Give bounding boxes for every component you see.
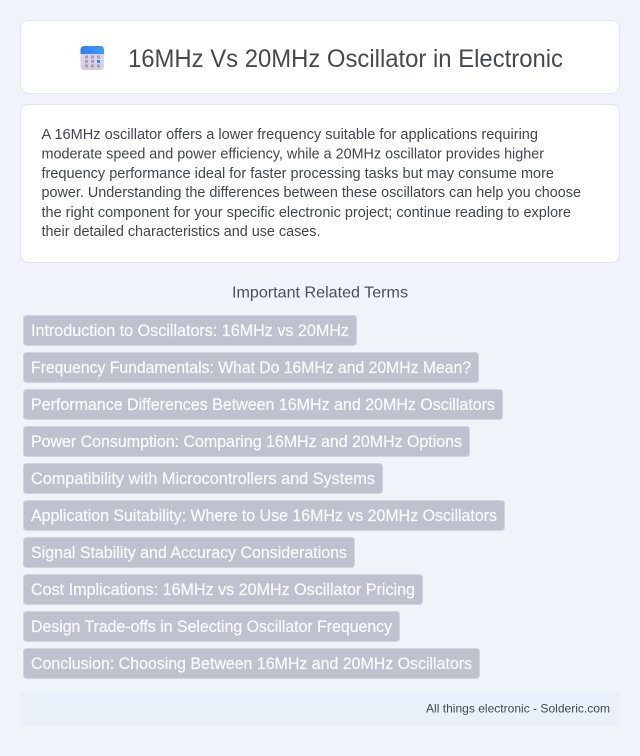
term 4 xyxy=(24,426,470,456)
panel: header xyxy=(20,20,620,94)
footer credit: All things electronic - Solderic.com xyxy=(426,702,610,716)
term 10 xyxy=(24,648,480,678)
term 1 xyxy=(24,316,356,346)
term 9 xyxy=(24,612,400,642)
panel: introduction text xyxy=(20,104,620,262)
term 6 xyxy=(24,500,504,530)
term 3 xyxy=(24,390,502,420)
term 2 xyxy=(24,352,478,382)
icon: calendar xyxy=(80,46,104,70)
text block: introduction paragraph: frequency performance ideal for faster processing tasks but may consume more xyxy=(42,166,554,182)
term 8: Cost Implications: 16MHz vs 20MHz Oscillator Pricing xyxy=(31,581,415,599)
term 7 xyxy=(24,538,354,568)
term 6: Application Suitability: Where to Use 16MHz vs 20MHz Oscillators xyxy=(31,507,497,525)
title: 16MHz Vs 20MHz Oscillator in Electronic xyxy=(128,45,563,73)
term 1: Introduction to Oscillators: 16MHz vs 20MHz xyxy=(31,322,349,340)
text block: introduction paragraph: power. Understanding the differences between these oscillators can help you choose xyxy=(42,185,581,201)
term 9: Design Trade-offs in Selecting Oscillator Frequency xyxy=(31,618,393,636)
text block: introduction paragraph: A 16MHz oscillator offers a lower frequency suitable for applications requiring xyxy=(42,127,538,143)
text block: introduction paragraph: their detailed characteristics and use cases. xyxy=(42,224,320,240)
text block: introduction paragraph: the right component for your specific electronic project; continue reading to explore xyxy=(42,205,571,221)
text block: introduction paragraph xyxy=(42,127,581,240)
text block: introduction paragraph: moderate speed and power efficiency, while a 20MHz oscillator provides higher xyxy=(42,146,544,162)
term 7: Signal Stability and Accuracy Considerations xyxy=(31,544,347,562)
footer xyxy=(20,692,620,726)
list: related terms xyxy=(24,316,504,678)
term 5 xyxy=(24,464,382,494)
term 3: Performance Differences Between 16MHz and 20MHz Oscillators xyxy=(31,396,495,414)
term 4: Power Consumption: Comparing 16MHz and 20MHz Options xyxy=(31,433,462,451)
term 8 xyxy=(24,574,422,604)
term 10: Conclusion: Choosing Between 16MHz and 20MHz Oscillators xyxy=(31,655,472,673)
term 2: Frequency Fundamentals: What Do 16MHz and 20MHz Mean? xyxy=(31,359,471,377)
heading: important related terms: Important Related Terms xyxy=(232,284,408,302)
term 5: Compatibility with Microcontrollers and Systems xyxy=(31,470,375,488)
